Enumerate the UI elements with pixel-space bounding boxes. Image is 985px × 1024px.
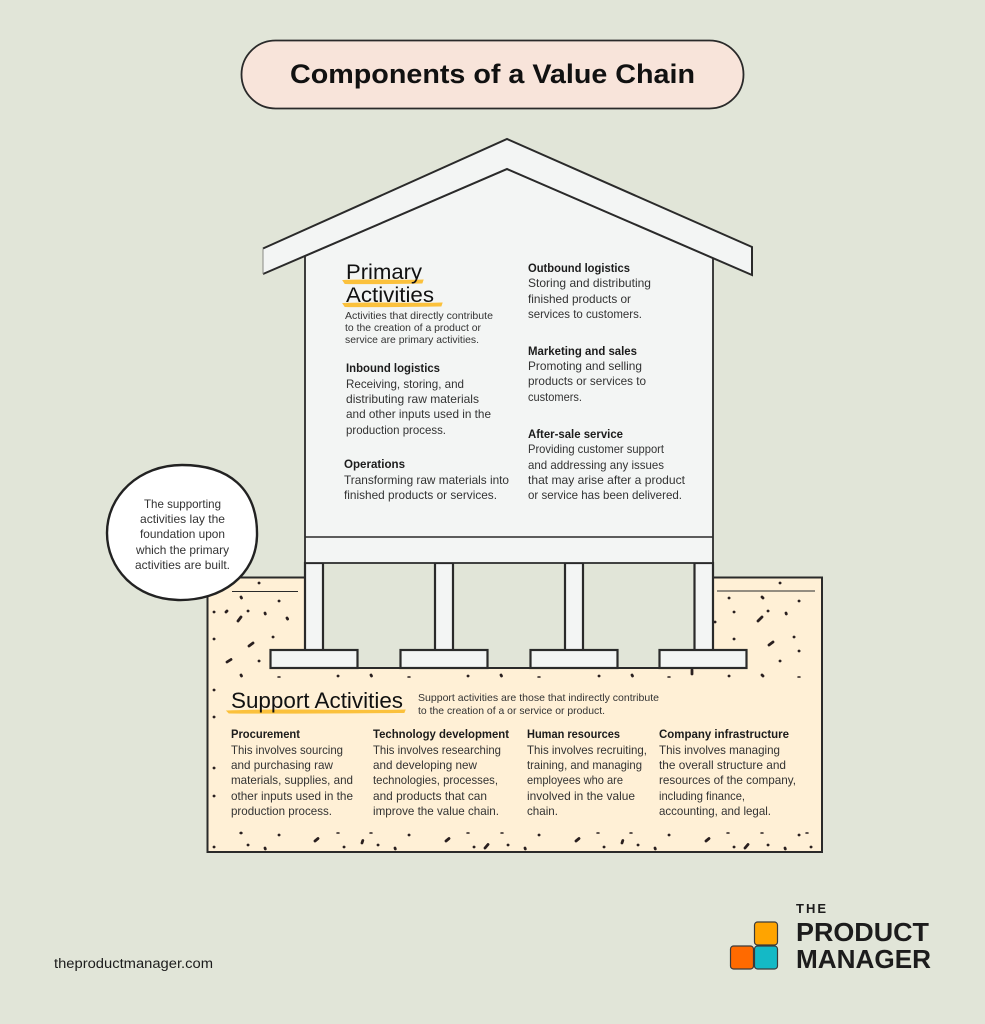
text block: company infrastructure: including finance,	[659, 789, 745, 803]
text block: outbound logistics: finished products or	[528, 292, 631, 306]
text block: outbound logistics: Storing and distributing	[528, 276, 651, 290]
text block: inbound logistics	[346, 361, 491, 437]
logo: the product manager	[730, 901, 931, 974]
text block: procurement: Procurement	[231, 727, 300, 741]
text block: technology development: improve the value chain.	[373, 804, 499, 818]
text block: operations	[344, 457, 509, 502]
text block: technology development: and developing new	[373, 758, 477, 772]
text block: technology development: This involves researching	[373, 743, 501, 757]
house body	[305, 169, 713, 563]
title: Components of a Value Chain	[290, 59, 695, 89]
text block: company infrastructure: the overall structure and	[659, 758, 786, 772]
text block: after-sale service: and addressing any issues	[528, 458, 664, 472]
text block: company infrastructure: resources of the company,	[659, 773, 796, 787]
text block: marketing and sales: products or services to	[528, 374, 646, 388]
heading: primary activities: Primary	[346, 261, 423, 284]
text block: outbound logistics: Outbound logistics	[528, 261, 630, 275]
callout bubble	[107, 465, 257, 600]
text block: company infrastructure: This involves managing	[659, 743, 780, 757]
text block: technology development: and products that can	[373, 789, 487, 803]
text block: company infrastructure	[659, 727, 796, 818]
callout bubble: activities are built.	[135, 558, 230, 572]
text block: procurement: other inputs used in the	[231, 789, 353, 803]
text block: human resources: involved in the value	[527, 789, 635, 803]
text block: inbound logistics: and other inputs used in the	[346, 407, 491, 421]
text block: outbound logistics: services to customers.	[528, 307, 642, 321]
text block: company infrastructure: Company infrastructure	[659, 727, 789, 741]
text block: marketing and sales: Marketing and sales	[528, 344, 637, 358]
text block: inbound logistics: production process.	[346, 423, 446, 437]
text block: operations: finished products or services.	[344, 488, 497, 502]
text block: operations: Operations	[344, 457, 405, 471]
text block: after-sale service: Providing customer support	[528, 442, 665, 456]
text block: company infrastructure: accounting, and legal.	[659, 804, 771, 818]
support description: Support activities are those that indirectly contribute	[418, 692, 659, 704]
ground panel: support activities	[208, 578, 822, 852]
text block: inbound logistics: Inbound logistics	[346, 361, 440, 375]
callout bubble: The supporting	[144, 497, 221, 511]
primary description: Activities that directly contribute	[345, 310, 493, 322]
text block: human resources: employees who are	[527, 773, 623, 787]
house: primary activities	[263, 139, 752, 668]
logo: the product manager: PRODUCT	[796, 917, 929, 947]
text block: procurement	[231, 727, 353, 818]
logo: the product manager: MANAGER	[796, 944, 931, 974]
text block: human resources: training, and managing	[527, 758, 642, 772]
callout bubble: which the primary	[135, 543, 229, 557]
text block: operations: Transforming raw materials into	[344, 473, 509, 487]
primary description	[345, 310, 493, 346]
text block: outbound logistics	[528, 261, 651, 321]
house footings	[270, 650, 746, 668]
heading: support activities: Support Activities	[231, 688, 403, 713]
callout bubble: foundation upon	[140, 527, 225, 541]
text block: procurement: This involves sourcing	[231, 743, 343, 757]
text block: after-sale service: that may arise after a product	[528, 473, 686, 487]
text block: human resources: Human resources	[527, 727, 620, 741]
text block: marketing and sales	[528, 344, 646, 404]
text block: marketing and sales: Promoting and selling	[528, 359, 642, 373]
text block: after-sale service: After-sale service	[528, 427, 623, 441]
text block: procurement: production process.	[231, 804, 332, 818]
text block: procurement: and purchasing raw	[231, 758, 333, 772]
support description	[418, 692, 659, 717]
text block: marketing and sales: customers.	[528, 390, 582, 404]
text block: technology development	[373, 727, 509, 818]
text block: human resources: chain.	[527, 804, 558, 818]
website url: theproductmanager.com	[54, 956, 213, 971]
text block: inbound logistics: Receiving, storing, and	[346, 377, 464, 391]
house posts	[305, 563, 713, 651]
primary description: to the creation of a product or	[345, 322, 481, 334]
text block: after-sale service: or service has been delivered.	[528, 488, 682, 502]
text block: technology development: Technology development	[373, 727, 509, 741]
soil specks	[214, 583, 811, 849]
logo: the product manager: THE	[796, 901, 826, 916]
title	[242, 40, 744, 108]
primary description: service are primary activities.	[345, 334, 479, 346]
heading: primary activities: Activities	[346, 284, 434, 307]
text block: procurement: materials, supplies, and	[231, 773, 353, 787]
icon: logo squares	[730, 922, 778, 969]
text block: technology development: technologies, processes,	[373, 773, 498, 787]
heading: primary activities	[343, 261, 442, 307]
text block: after-sale service	[528, 427, 686, 502]
roof	[263, 139, 752, 275]
text block: human resources: This involves recruiting,	[527, 743, 647, 757]
callout bubble: activities lay the	[140, 512, 225, 526]
text block: inbound logistics: distributing raw materials	[346, 392, 479, 406]
text block: human resources	[527, 727, 647, 818]
support description: to the creation of a or service or product.	[418, 705, 605, 717]
